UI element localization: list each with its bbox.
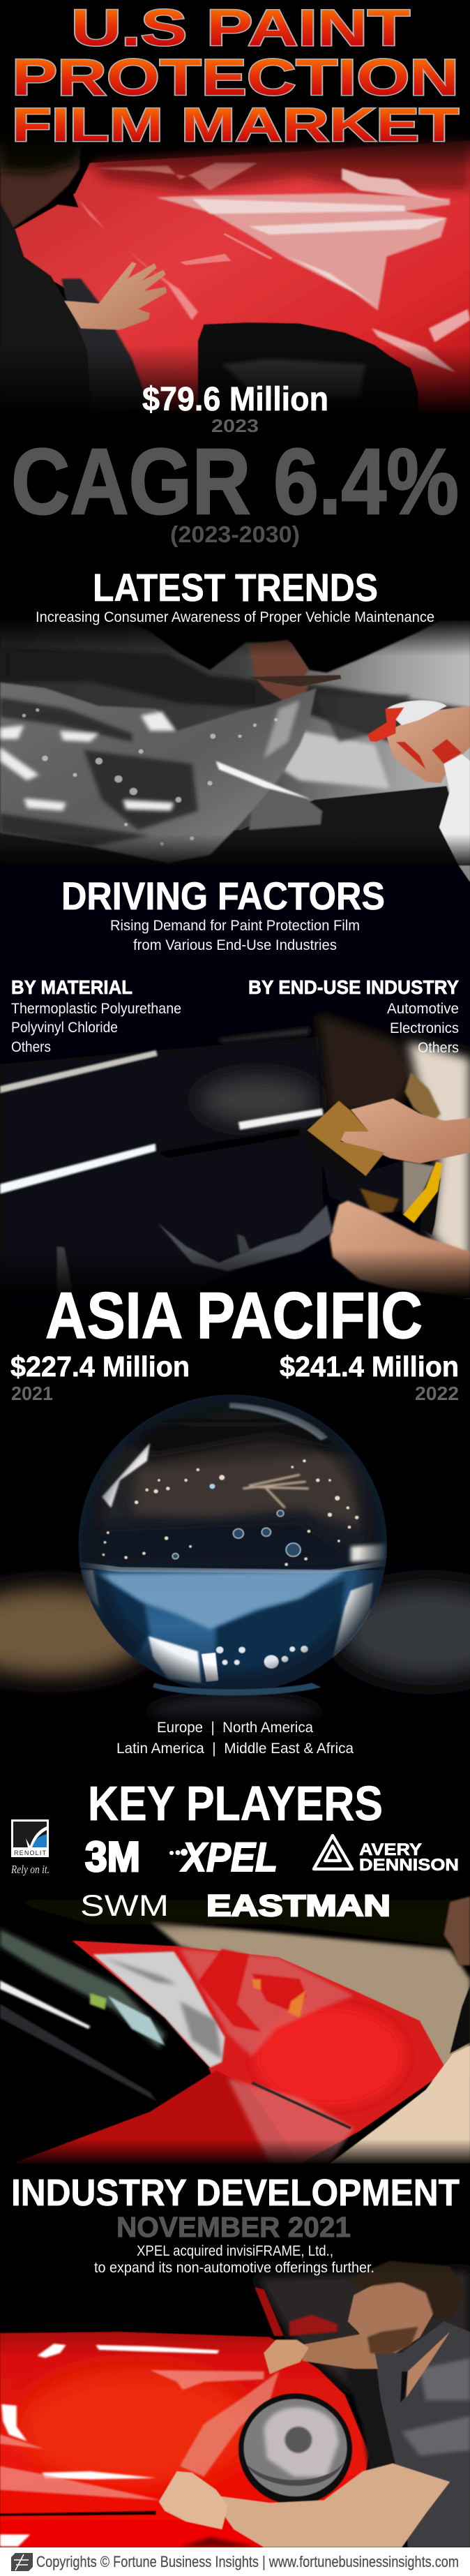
- lens upper white: [264, 2407, 339, 2477]
- photo: red car with film and windshield: [0, 1896, 470, 2164]
- upper half: [79, 1394, 388, 1570]
- sphere base: [153, 1683, 321, 1695]
- hand holding spray: [386, 706, 470, 783]
- film foam: [156, 193, 450, 311]
- photo top fade: [0, 2164, 470, 2282]
- foam streaks: [192, 199, 447, 306]
- soft glow: [198, 1075, 318, 1125]
- bubbles: [172, 1510, 301, 1559]
- tagline: Rely on it.: [10, 1863, 50, 1876]
- spray trigger: [367, 707, 404, 742]
- regional value 2021: [10, 1350, 190, 1404]
- windshield: [0, 1914, 210, 2164]
- man's hair: [0, 133, 90, 174]
- lens lower: [246, 2461, 344, 2486]
- film dark folds: [0, 698, 198, 847]
- wordmark: RENOLIT: [14, 1849, 46, 1856]
- headlight lens: [244, 2399, 347, 2496]
- logo: XPEL: [169, 1835, 278, 1880]
- film edge streak: [216, 761, 312, 800]
- bright right horizon: [351, 1544, 387, 1562]
- upper arm: [300, 2333, 378, 2369]
- development text: [94, 2243, 374, 2276]
- headlight under film: [249, 789, 322, 830]
- top black arms: [90, 604, 470, 673]
- film on lower red: [228, 2078, 354, 2164]
- windshield reflection: [0, 1930, 165, 2048]
- black base: [0, 2166, 470, 2547]
- wheel arch: [198, 322, 418, 433]
- photo top fade: [0, 129, 470, 171]
- film clear top: [180, 1949, 354, 2057]
- development date: NOVEMBER 2021: [116, 2211, 351, 2243]
- regional value 2022: [280, 1350, 459, 1404]
- protection film sheet: [0, 683, 317, 863]
- photo top fade: [0, 618, 470, 656]
- footer band: [0, 2547, 470, 2576]
- man's head: [348, 2279, 435, 2353]
- film gold reflection: [360, 1189, 399, 1213]
- photo: crystal ball: [0, 1394, 470, 1732]
- upper dark red shading: [90, 135, 470, 191]
- driving factor text: [110, 918, 360, 953]
- glass sphere: [79, 1394, 388, 1694]
- lower hand: [330, 1200, 470, 1298]
- film upper curl: [264, 701, 300, 759]
- headlight chrome ring: [238, 2393, 352, 2505]
- bottle tail: [459, 865, 470, 882]
- segment: by material: [11, 976, 181, 1055]
- spray bottle head: [387, 701, 447, 725]
- film drip 2: [57, 1234, 250, 1298]
- car door brown: [318, 1015, 414, 1111]
- squeegee: [50, 185, 79, 207]
- logo: avery dennison: [314, 1836, 459, 1875]
- line two: from Various End-Use Industries: [133, 937, 337, 953]
- market size value: $79.6 Million: [142, 381, 328, 418]
- photo fade into asia pacific: [0, 1249, 470, 1298]
- bottom left window: [149, 1636, 201, 1683]
- logo: SWM: SWM: [80, 1889, 169, 1923]
- man's sleeve: [450, 1985, 470, 2054]
- mirror: [289, 2315, 338, 2336]
- streak on hood: [180, 233, 273, 265]
- top dark: [120, 1422, 354, 1458]
- man's face: [444, 1896, 470, 1965]
- logo: 3M: 3M: [85, 1833, 140, 1880]
- car windscreen shape: [315, 695, 411, 742]
- hood seam: [0, 2511, 156, 2516]
- lower lights: [216, 1646, 308, 1669]
- region line 2: Latin America | Middle East & Africa: [116, 1741, 354, 1757]
- foam dark streak: [102, 1957, 222, 2060]
- heading: asia pacific: ASIA PACIFIC: [45, 1279, 423, 1352]
- chrome strip: [404, 1073, 441, 1122]
- photo: film being sprayed on headlight: [0, 604, 470, 865]
- garage background: [0, 620, 470, 863]
- peeled film: [180, 2372, 279, 2477]
- lower black band: [0, 415, 470, 625]
- tool: [249, 675, 341, 687]
- lens bulb area: [285, 2427, 312, 2453]
- region line 1: Europe | North America: [157, 1720, 313, 1736]
- fade below red car: [0, 2139, 470, 2167]
- wiper arm: [0, 2004, 156, 2101]
- red car body: [72, 1941, 447, 2164]
- light streak 1: [0, 1050, 158, 1093]
- title line 2: PROTECTION: [12, 50, 459, 106]
- footer logo: [11, 2553, 33, 2571]
- black backdrop: [0, 1315, 470, 1732]
- hood sheen: [0, 1036, 324, 1298]
- car body lights: [282, 731, 390, 789]
- industry 3: Others: [418, 1040, 459, 1056]
- orange reflection: [252, 1979, 306, 2018]
- material 2: Polyvinyl Chloride: [11, 1020, 118, 1036]
- film over arch: [222, 359, 366, 397]
- right lower fender band: [372, 309, 470, 373]
- upper hand: [249, 640, 309, 707]
- box: [11, 1819, 49, 1857]
- dark car front: [0, 786, 470, 865]
- triangle mark: [314, 1836, 352, 1869]
- man's head: [0, 144, 81, 228]
- hood highlights: [0, 2344, 219, 2547]
- upper hand: [340, 1099, 470, 1163]
- panel line: [252, 2083, 351, 2128]
- industry 1: Automotive: [387, 1001, 459, 1017]
- heading: driving factors: DRIVING FACTORS: [61, 874, 385, 918]
- photo: man pulling film over red car headlight: [0, 2166, 470, 2547]
- material 3: Others: [11, 1039, 51, 1055]
- firework spray: [243, 1475, 309, 1508]
- title line 1: U.S PAINT: [71, 0, 410, 57]
- year: 2021: [11, 1383, 53, 1404]
- heading: latest trends: LATEST TRENDS: [93, 565, 378, 609]
- dark lower reflection: [96, 1574, 344, 1692]
- bottle body: [439, 754, 470, 865]
- logo plate: [11, 2553, 33, 2571]
- segment: by end-use industry: [248, 976, 459, 1056]
- left highlight: [102, 1443, 150, 1508]
- main title: [12, 0, 459, 151]
- dark gap: [420, 1177, 441, 1235]
- hand: [64, 262, 167, 330]
- horizon ring: [79, 1561, 388, 1574]
- bottle neck red: [396, 739, 462, 769]
- film streaks: [0, 2370, 264, 2501]
- bright red: [255, 2007, 404, 2106]
- forearm: [210, 2464, 450, 2547]
- white streak: [0, 1981, 90, 2029]
- left side rim: [81, 1570, 99, 1607]
- photo bottom fade: [0, 834, 470, 867]
- backdrop wall: [150, 1921, 470, 2076]
- pale reflection: [108, 1996, 165, 2046]
- film highlights: [0, 711, 176, 811]
- red patches on film: [198, 1949, 306, 2032]
- logo: eastman: EASTMAN: [206, 1889, 391, 1923]
- car body bands: [0, 648, 470, 742]
- light streak 2: [238, 1108, 324, 1130]
- white tick: [26, 1826, 47, 1847]
- beard: [367, 2327, 418, 2354]
- logo mark: [14, 2554, 29, 2570]
- title line 3: FILM MARKET: [12, 98, 459, 151]
- trend text: Increasing Consumer Awareness of Proper Vehicle Maintenance: [36, 609, 434, 625]
- glass band upper brown: [132, 1452, 360, 1527]
- black blade: [304, 1131, 364, 1186]
- shirt light pattern: [402, 2358, 470, 2455]
- dark upper wall band: [0, 1899, 470, 1949]
- foam film area: [93, 1951, 225, 2067]
- right bottom reflection: [331, 1580, 375, 1660]
- line one: Rising Demand for Paint Protection Film: [110, 918, 360, 934]
- line one: XPEL acquired invisiFRAME, Ltd.,: [137, 2243, 333, 2259]
- shirt neck dark: [400, 2372, 408, 2403]
- dark behind arm: [344, 2369, 399, 2479]
- hair: [348, 2261, 464, 2318]
- value: $241.4 Million: [280, 1350, 459, 1383]
- light streak 3: [0, 1144, 156, 1194]
- photo bottom fade: [0, 345, 470, 415]
- tabletop right cool: [339, 1585, 470, 1679]
- logo: renolit: [10, 1819, 50, 1876]
- lower red car: [12, 2070, 300, 2164]
- wordmark: XPEL: [180, 1835, 278, 1880]
- photo fade under sphere: [0, 1696, 470, 1731]
- foam upper left: [93, 163, 258, 191]
- garage dark: [255, 2269, 470, 2479]
- front wheel: [61, 278, 150, 414]
- water droplets: [22, 708, 278, 846]
- tabletop left warm: [0, 1588, 153, 1676]
- key players logos: [10, 1776, 459, 1923]
- fender highlight strip: [78, 199, 198, 320]
- sphere shadow reflection: [150, 1695, 318, 1729]
- dark square: [13, 1822, 47, 1847]
- dots: [169, 1849, 188, 1856]
- man's arm: [330, 2046, 470, 2164]
- photo: installer pressing film on red car hood: [0, 133, 470, 433]
- dark mid: [90, 1519, 360, 1563]
- year: 2022: [415, 1383, 459, 1404]
- hood hot spot: [21, 2369, 249, 2485]
- man's shoulder: [0, 202, 93, 433]
- value: $227.4 Million: [10, 1350, 190, 1383]
- segment heading: BY MATERIAL: [11, 976, 132, 998]
- dark base: [0, 865, 470, 1298]
- car hood: [15, 141, 470, 414]
- dark shade at headlight base: [180, 2537, 258, 2547]
- segment heading: BY END-USE INDUSTRY: [248, 976, 459, 998]
- foam patch upper right: [342, 168, 450, 202]
- dark film: [306, 1138, 402, 1216]
- chrome strip lower: [403, 1161, 435, 1214]
- top arc highlight: [229, 1402, 328, 1440]
- lower half: [79, 1570, 388, 1694]
- heading: key players: KEY PLAYERS: [88, 1776, 383, 1831]
- market size year: 2023: [211, 415, 259, 436]
- neck and chest skin: [407, 2332, 450, 2398]
- green tint: [90, 1993, 107, 2009]
- footer: [0, 2547, 470, 2576]
- faint streak top: [219, 1028, 309, 1042]
- CAGR period: (2023-2030): [170, 521, 300, 547]
- red pillar: [255, 2287, 283, 2336]
- man's shirt: [375, 2321, 470, 2547]
- window pane 2: [202, 1653, 218, 1682]
- wordmark line 1: AVERY: [359, 1840, 422, 1859]
- upper hand: [264, 2340, 309, 2374]
- material 1: Thermoplastic Polyurethane: [11, 1001, 181, 1017]
- right light wall: [408, 1042, 470, 1279]
- blue corner: [31, 1834, 47, 1847]
- wordmark line 2: DENNISON: [359, 1856, 459, 1875]
- lower hand: [159, 2471, 228, 2529]
- other regions: [116, 1720, 354, 1757]
- line two: to expand its non-automotive offerings further.: [94, 2260, 374, 2276]
- peeled film strip: [158, 1205, 333, 1271]
- reflected dark band: [156, 1128, 300, 1158]
- frost band: [99, 1571, 344, 1629]
- gold squeegee: [308, 1101, 384, 1176]
- yellow stripe: [403, 1162, 442, 1223]
- bokeh lights: [103, 1459, 358, 1566]
- red hood: [0, 2332, 369, 2547]
- photo: squeegee applying film on dark car: [0, 865, 470, 1298]
- industry 2: Electronics: [390, 1020, 459, 1036]
- glass edge darkening: [79, 1394, 387, 1692]
